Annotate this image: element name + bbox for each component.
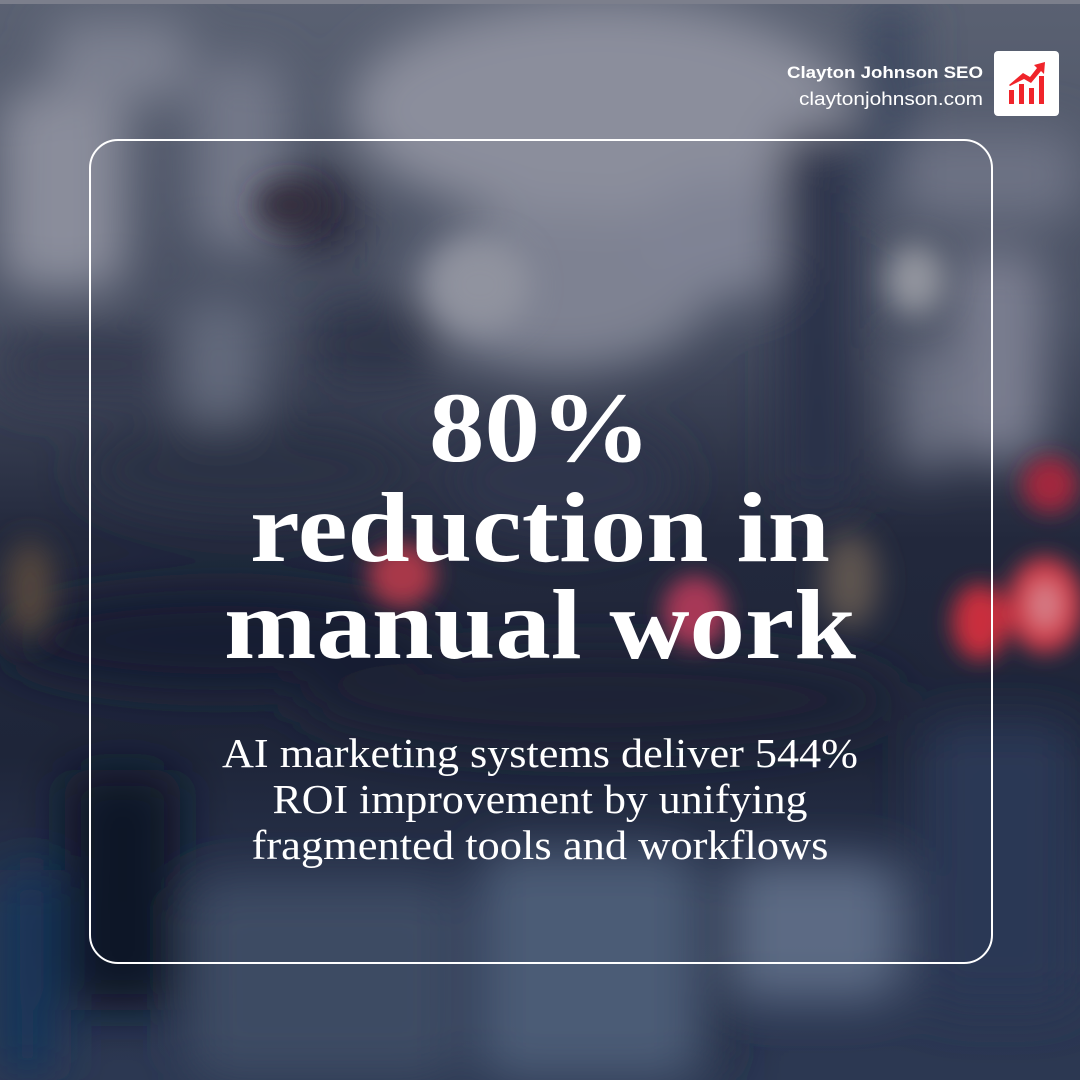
headline: 80% <box>429 372 651 483</box>
subheading: AI marketing systems deliver 544% <box>222 730 858 776</box>
headline <box>224 372 856 680</box>
brand text <box>787 63 983 109</box>
subheading <box>222 730 858 868</box>
logo: red growth chart <box>994 51 1059 116</box>
headline: reduction in <box>250 472 830 583</box>
headline: manual work <box>224 569 856 680</box>
subheading: fragmented tools and workflows <box>252 822 828 868</box>
brand text: claytonjohnson.com <box>799 89 983 109</box>
rounded frame <box>90 140 992 963</box>
brand text: Clayton Johnson SEO <box>787 63 983 82</box>
subheading: ROI improvement by unifying <box>272 776 808 822</box>
